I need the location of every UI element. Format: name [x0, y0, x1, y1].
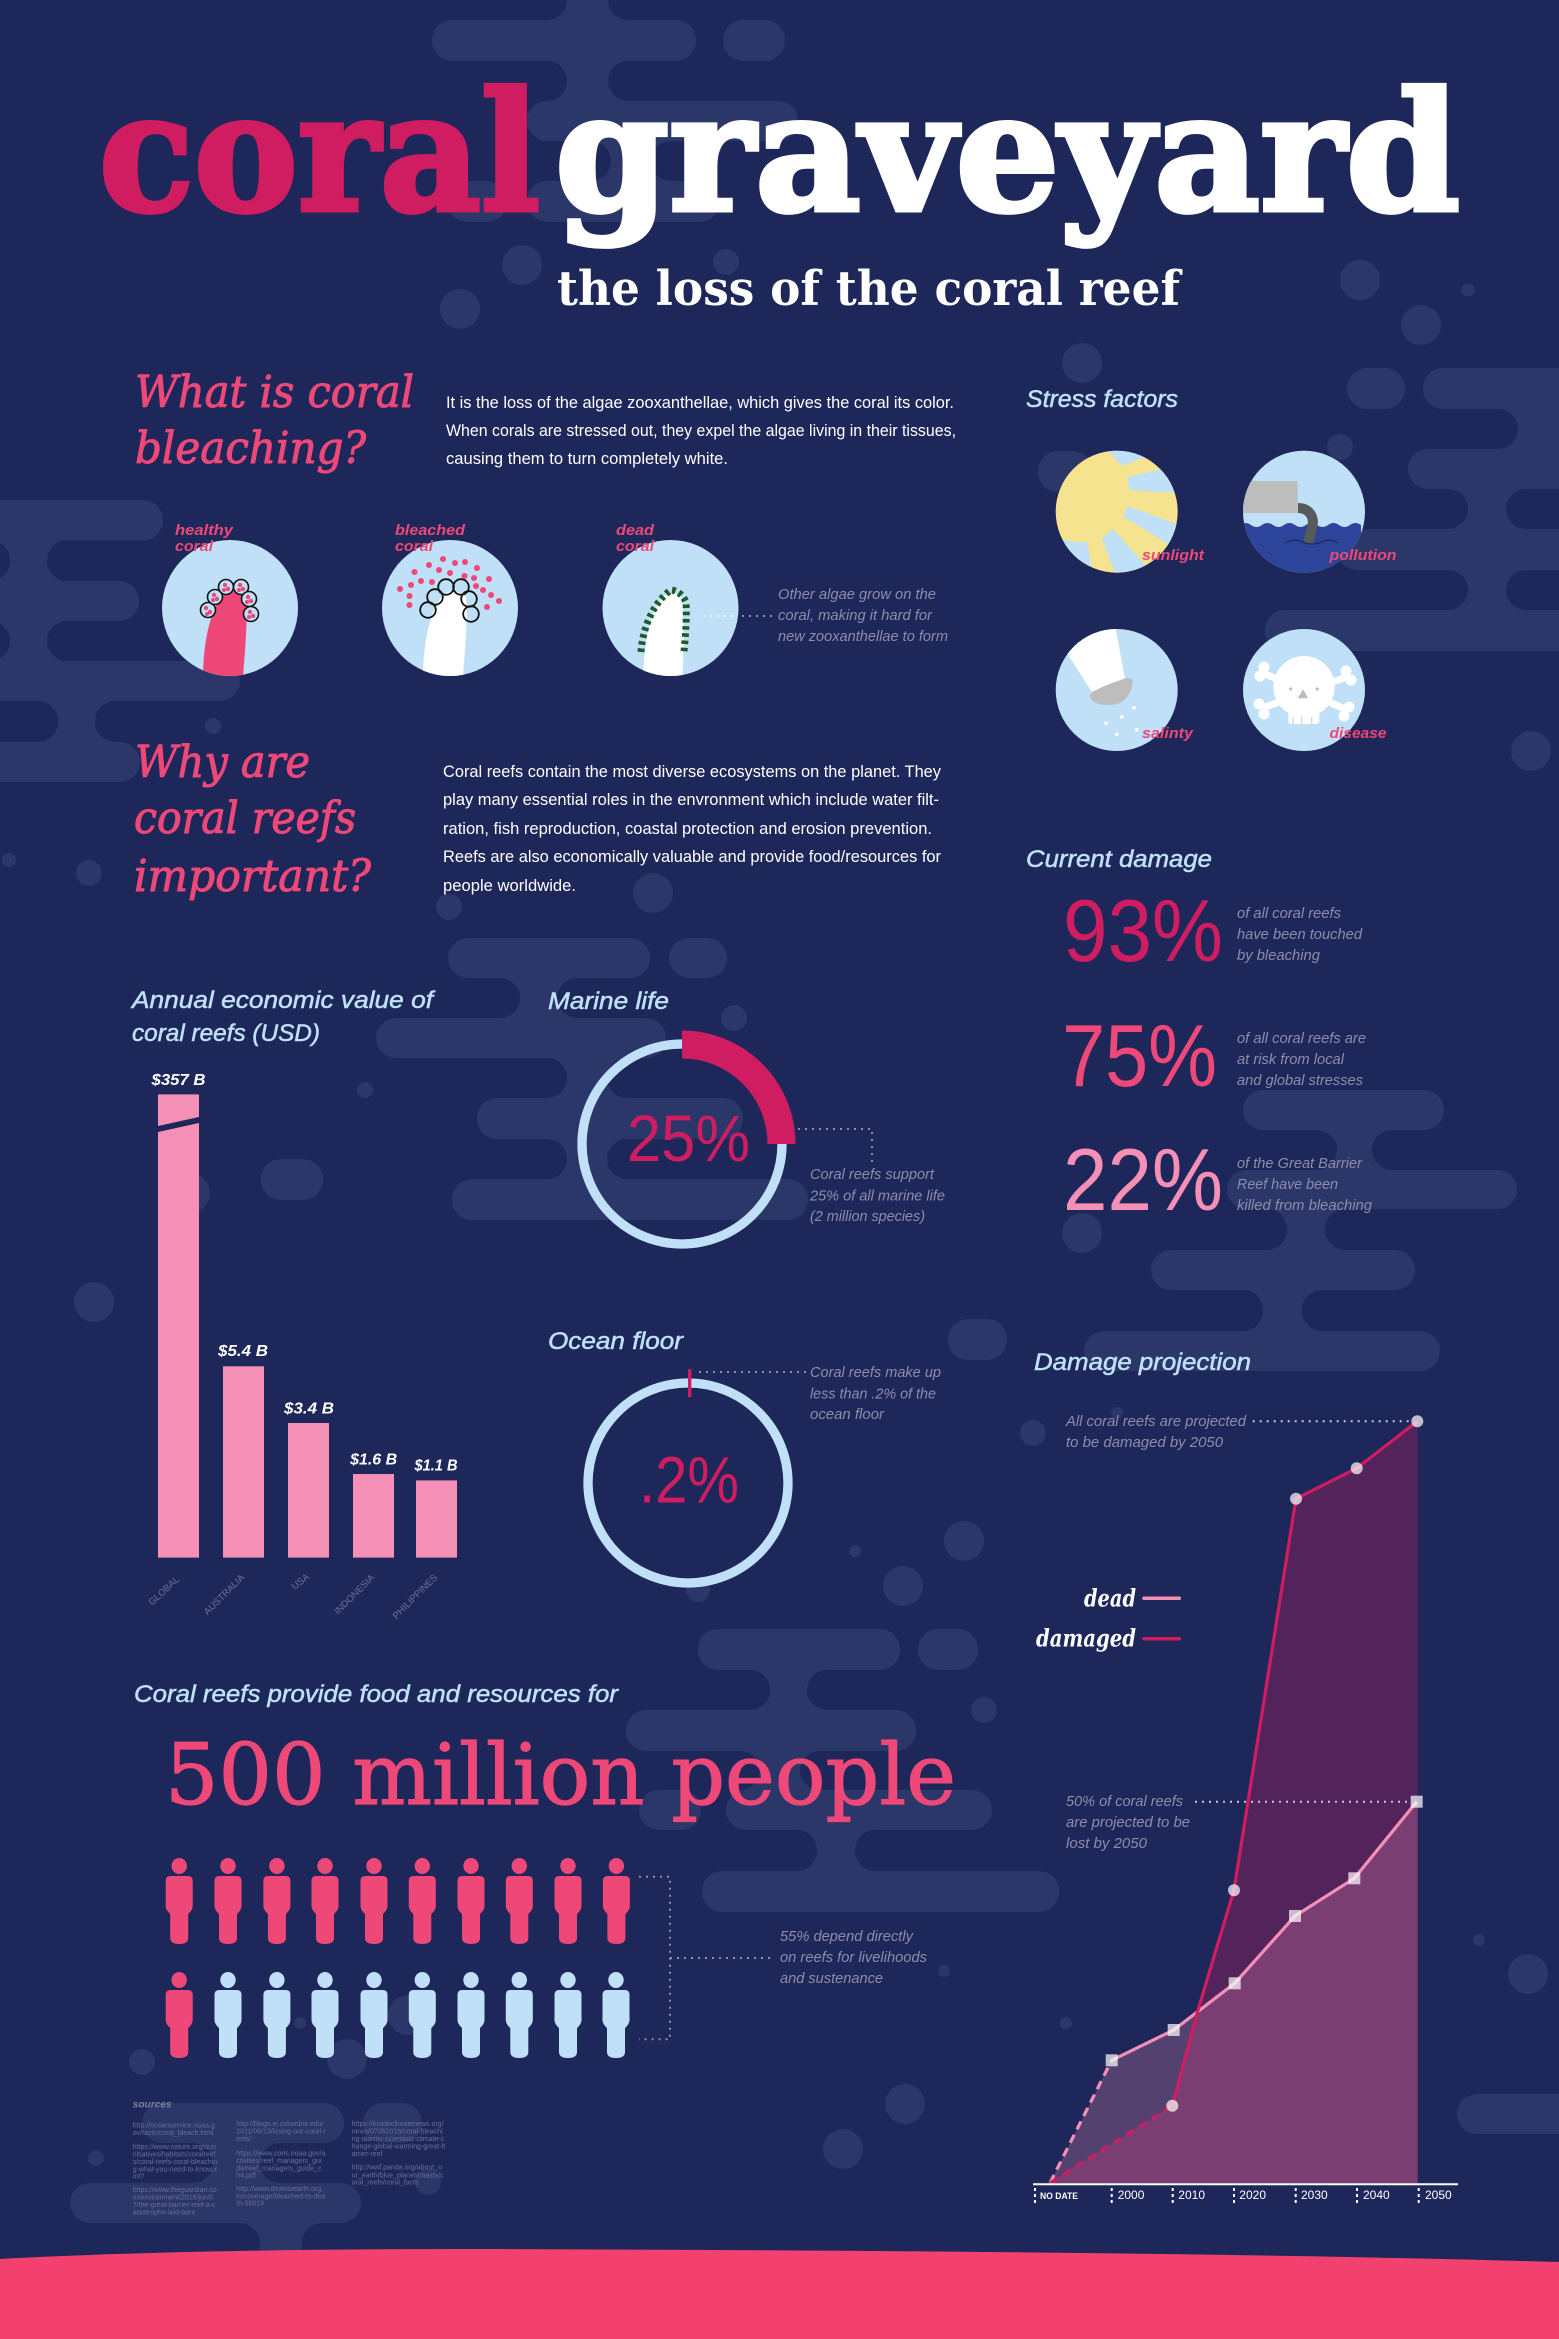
heading: what is coral bleaching: bleaching? — [135, 423, 366, 474]
heading: damage projection: Damage projection — [1034, 1349, 1251, 1376]
bar chart: economic value: $357 B — [150, 1072, 206, 1089]
x axis: 2020 — [1239, 2188, 1266, 2202]
donut chart: marine life 25%: 25% — [627, 1101, 750, 1175]
callout: 55 percent depend: 55% depend directly — [780, 1928, 914, 1945]
sources: news/07062016/coral-bleachi — [352, 2128, 443, 2135]
x axis: NO DATE — [1040, 2191, 1078, 2202]
icon: pollution — [1240, 451, 1396, 580]
sources: s/coral-reefs-coral-bleachin — [133, 2159, 217, 2166]
stat: 75%: and global stresses — [1237, 1072, 1363, 1089]
label: disease: disease — [1330, 725, 1386, 742]
label: salinity: salinty — [1142, 725, 1194, 742]
text block: bleaching definition — [446, 394, 956, 468]
donut chart: marine life 25% — [582, 1044, 782, 1244]
sources: 2011/06/13/losing-our-coral-r — [236, 2129, 326, 2136]
callout: 50 percent lost: 50% of coral reefs — [1066, 1793, 1183, 1810]
heading: annual economic value: coral reefs (USD) — [132, 1020, 320, 1047]
stat: 22%: Reef have been — [1237, 1176, 1338, 1193]
sources: ov/facts/coral_bleach.html — [133, 2130, 214, 2137]
sources: oral_reefs/coral_facts — [352, 2180, 419, 2187]
title — [99, 56, 1460, 249]
callout: 50 percent lost: are projected to be — [1066, 1814, 1190, 1831]
sources: atastrophe-laid-bare — [133, 2210, 195, 2217]
text block: why reefs matter: people worldwide. — [443, 877, 576, 895]
bar chart: economic value: INDONESIA — [332, 1572, 378, 1617]
label: dead coral: dead — [616, 522, 655, 539]
sources: m/environment/2016/jun/0 — [133, 2194, 214, 2201]
heading: food and resources: Coral reefs provide food and resources for — [134, 1681, 619, 1708]
stat: 93% — [1063, 881, 1363, 980]
text block: why reefs matter: play many essential roles in the envronment which include water filt- — [443, 791, 939, 809]
big number: 500 million people: 500 million people — [165, 1726, 956, 1824]
stat: 75% — [1062, 1006, 1366, 1105]
heading: what is coral bleaching: What is coral — [135, 367, 414, 418]
callout: all reefs damaged: All coral reefs are projected — [1065, 1413, 1247, 1430]
heading: current damage: Current damage — [1026, 846, 1212, 873]
sources: ctivities/reef_managers_gui — [236, 2158, 322, 2165]
stat: 22%: of the Great Barrier — [1237, 1155, 1363, 1172]
text block: why reefs matter — [443, 763, 942, 895]
sources: https://www.nature.org/ouri — [133, 2144, 216, 2151]
callout: 55 percent depend: and sustenance — [780, 1970, 883, 1987]
sources — [133, 2099, 446, 2217]
bottom wave band — [0, 2249, 1559, 2339]
icon: healthy coral — [162, 522, 298, 690]
callout: marine life — [798, 1129, 945, 1225]
label: healthy coral: coral — [175, 538, 214, 555]
area chart: damage projection — [1033, 1415, 1458, 2203]
bar chart: economic value — [147, 1072, 457, 1622]
callout: other algae: new zooxanthellae to form — [778, 628, 948, 645]
donut chart: ocean floor .2%: .2% — [639, 1443, 739, 1517]
sources: de/reef_managers_guide_c — [236, 2165, 322, 2172]
callout: 50 percent lost — [1066, 1793, 1410, 1852]
label: healthy coral: healthy — [175, 522, 234, 539]
legend: dead and damaged: dead — [1084, 1584, 1136, 1613]
heading: annual economic value — [130, 987, 436, 1047]
text block: bleaching definition: When corals are stressed out, they expel the algae living in their tissues, — [446, 422, 956, 440]
bar chart: economic value: $3.4 B — [283, 1401, 334, 1418]
x axis: 2040 — [1363, 2188, 1390, 2202]
stat: 93%: 93% — [1063, 881, 1223, 980]
title: graveyard — [555, 56, 1460, 249]
x axis: 2010 — [1178, 2188, 1205, 2202]
sources: https://www.theguardian.co — [133, 2187, 217, 2194]
callout: other algae: Other algae grow on the — [778, 586, 936, 603]
heading: annual economic value: Annual economic value of — [130, 987, 436, 1014]
callout: ocean floor — [699, 1364, 941, 1423]
sources: 7/the-great-barrier-reef-a-c — [133, 2202, 216, 2209]
sources: eefs/ — [236, 2136, 252, 2143]
subtitle: the loss of the coral reef — [557, 261, 1183, 317]
callout: all reefs damaged: to be damaged by 2050 — [1066, 1434, 1224, 1451]
heading: stress factors: Stress factors — [1026, 386, 1178, 413]
callout: ocean floor: ocean floor — [810, 1406, 885, 1423]
sources: https://www.coris.noaa.gov/a — [236, 2151, 326, 2158]
text block: bleaching definition: It is the loss of the algae zooxanthellae, which gives the coral its color. — [446, 394, 954, 412]
callout: 55 percent depend: on reefs for livelihoods — [780, 1949, 927, 1966]
sources: arrier-reef — [352, 2151, 382, 2158]
bar chart: economic value: USA — [290, 1571, 312, 1592]
sources: http://blogs.ei.columbia.edu/ — [236, 2121, 324, 2128]
sources: h4.pdf — [236, 2172, 256, 2179]
heading: what is coral bleaching — [135, 367, 414, 474]
stat: 75%: 75% — [1062, 1006, 1217, 1105]
bar chart: economic value: $1.6 B — [349, 1451, 397, 1468]
x axis: 2000 — [1118, 2188, 1145, 2202]
bar chart: economic value: PHILIPPINES — [391, 1572, 440, 1622]
sources: ml? — [133, 2174, 144, 2181]
stat: 22%: killed from bleaching — [1237, 1197, 1373, 1214]
sources: http://oceanservice.noaa.g — [133, 2122, 215, 2129]
bar chart: economic value: GLOBAL — [147, 1574, 182, 1608]
callout: marine life: (2 million species) — [810, 1208, 925, 1225]
callout: other algae — [703, 586, 948, 645]
title: coral — [99, 56, 540, 249]
heading: why are coral reefs important — [134, 737, 371, 902]
sources: in/coverage/bleached-to-dea — [236, 2193, 325, 2200]
x axis: 2050 — [1425, 2188, 1452, 2202]
pictogram: people row 1 — [166, 1858, 630, 1944]
label: pollution: pollution — [1328, 547, 1396, 564]
label: healthy coral — [175, 522, 234, 555]
callout: marine life: Coral reefs support — [810, 1166, 935, 1183]
callout: ocean floor: Coral reefs make up — [810, 1364, 941, 1381]
stat: 93%: of all coral reefs — [1237, 905, 1341, 922]
heading: why are coral reefs important: important? — [134, 851, 371, 902]
callout: ocean floor: less than .2% of the — [810, 1386, 936, 1402]
label: dead coral — [616, 522, 655, 555]
sources: http://www.downtoearth.org. — [236, 2186, 323, 2193]
sources: g-what-you-need-to-know.x — [133, 2166, 218, 2173]
sources: sources — [133, 2099, 172, 2111]
sources: nitiatives/habitats/coralreef — [133, 2151, 216, 2158]
icon: dead coral — [602, 522, 738, 690]
stat: 22% — [1063, 1130, 1373, 1229]
label: bleached coral: coral — [395, 538, 434, 555]
bar chart: economic value: AUSTRALIA — [202, 1572, 248, 1617]
label: bleached coral — [395, 522, 466, 555]
bar chart: economic value: $1.1 B — [414, 1457, 458, 1474]
callout: 50 percent lost: lost by 2050 — [1066, 1835, 1148, 1852]
bar chart: economic value: $5.4 B — [217, 1343, 268, 1360]
sources: ur_earth/blue_planet/coasts/c — [352, 2172, 444, 2179]
legend: dead and damaged — [1036, 1584, 1179, 1653]
callout: all reefs damaged — [1065, 1413, 1412, 1451]
icon: salinity — [1056, 620, 1194, 751]
stat: 75%: at risk from local — [1237, 1051, 1345, 1068]
pictogram: people row 2 — [166, 1972, 629, 2058]
legend: dead and damaged: damaged — [1036, 1624, 1136, 1653]
label: dead coral: coral — [616, 538, 655, 555]
callout: 55 percent depend — [639, 1877, 927, 2039]
heading: marine life: Marine life — [548, 988, 669, 1015]
icon: disease skull — [1243, 629, 1386, 751]
donut chart: ocean floor .2% — [588, 1369, 788, 1583]
callout: marine life: 25% of all marine life — [809, 1188, 945, 1204]
stat: 75%: of all coral reefs are — [1237, 1030, 1366, 1047]
icon: bleached coral — [382, 522, 518, 690]
text block: why reefs matter: ration, fish reproduction, coastal protection and erosion prevention. — [443, 820, 932, 838]
text block: why reefs matter: Coral reefs contain the most diverse ecosystems on the planet. They — [443, 763, 942, 781]
text block: bleaching definition: causing them to turn completely white. — [446, 450, 728, 468]
sources: http://wwf.panda.org/about_o — [352, 2165, 442, 2172]
text block: why reefs matter: Reefs are also economically valuable and provide food/resources for — [443, 848, 941, 866]
x axis — [1033, 2184, 1458, 2203]
sources: https://insideclimatenews.org/ — [352, 2121, 444, 2128]
x axis: 2030 — [1301, 2188, 1328, 2202]
heading: why are coral reefs important: coral reefs — [134, 793, 356, 844]
sources: ng-alarms-scientists-climate-c — [352, 2136, 445, 2143]
icon: sunlight — [1056, 450, 1204, 573]
label: bleached coral: bleached — [395, 522, 466, 539]
heading: ocean floor: Ocean floor — [548, 1328, 684, 1355]
stat: 93%: have been touched — [1237, 926, 1363, 943]
stat: 22%: 22% — [1063, 1130, 1223, 1229]
callout: other algae: coral, making it hard for — [778, 607, 933, 624]
sources: th-56019 — [236, 2201, 264, 2208]
heading: why are coral reefs important: Why are — [135, 737, 310, 788]
label: sunlight: sunlight — [1142, 547, 1205, 564]
sources: hange-global-warming-great-b — [352, 2143, 446, 2150]
stat: 93%: by bleaching — [1237, 947, 1321, 964]
